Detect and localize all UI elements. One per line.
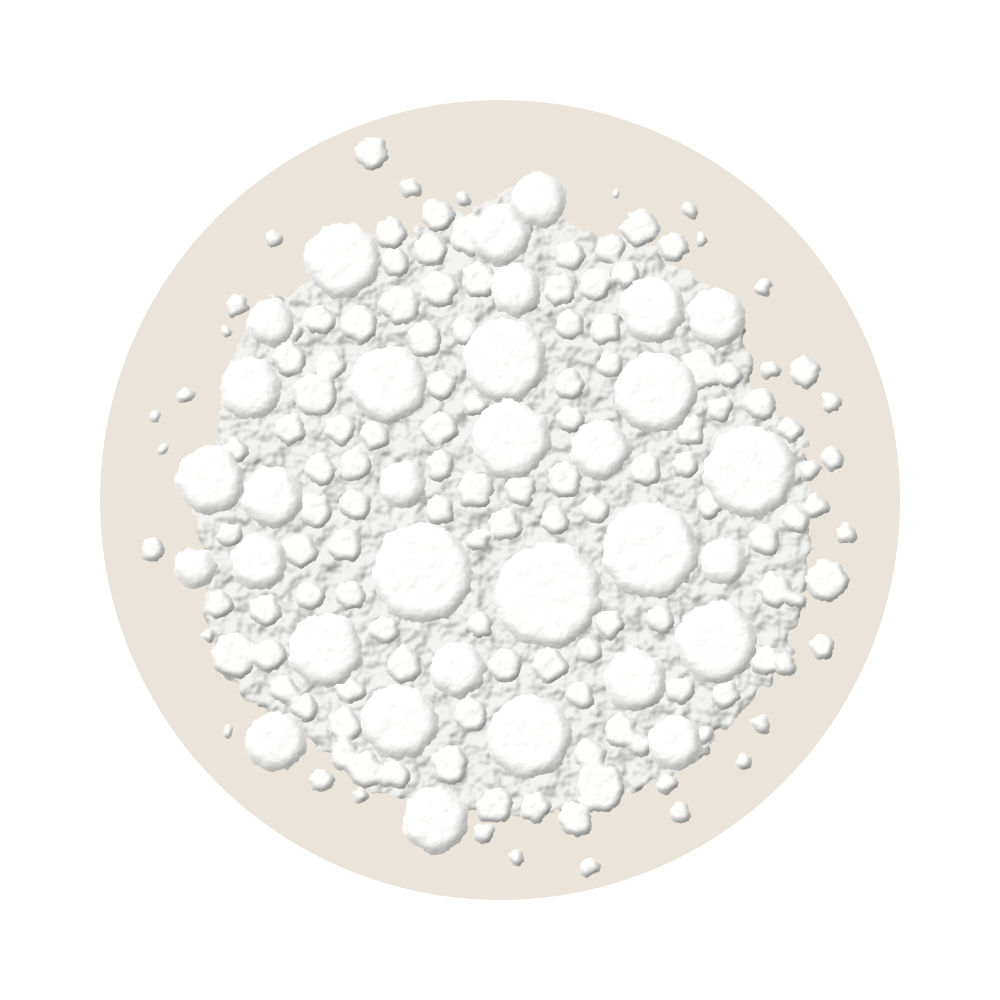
powder base mass xyxy=(195,185,815,815)
background circle xyxy=(100,100,900,900)
scattered grains xyxy=(141,137,856,877)
large clumps layer xyxy=(174,172,796,853)
small clumps layer xyxy=(206,203,820,834)
